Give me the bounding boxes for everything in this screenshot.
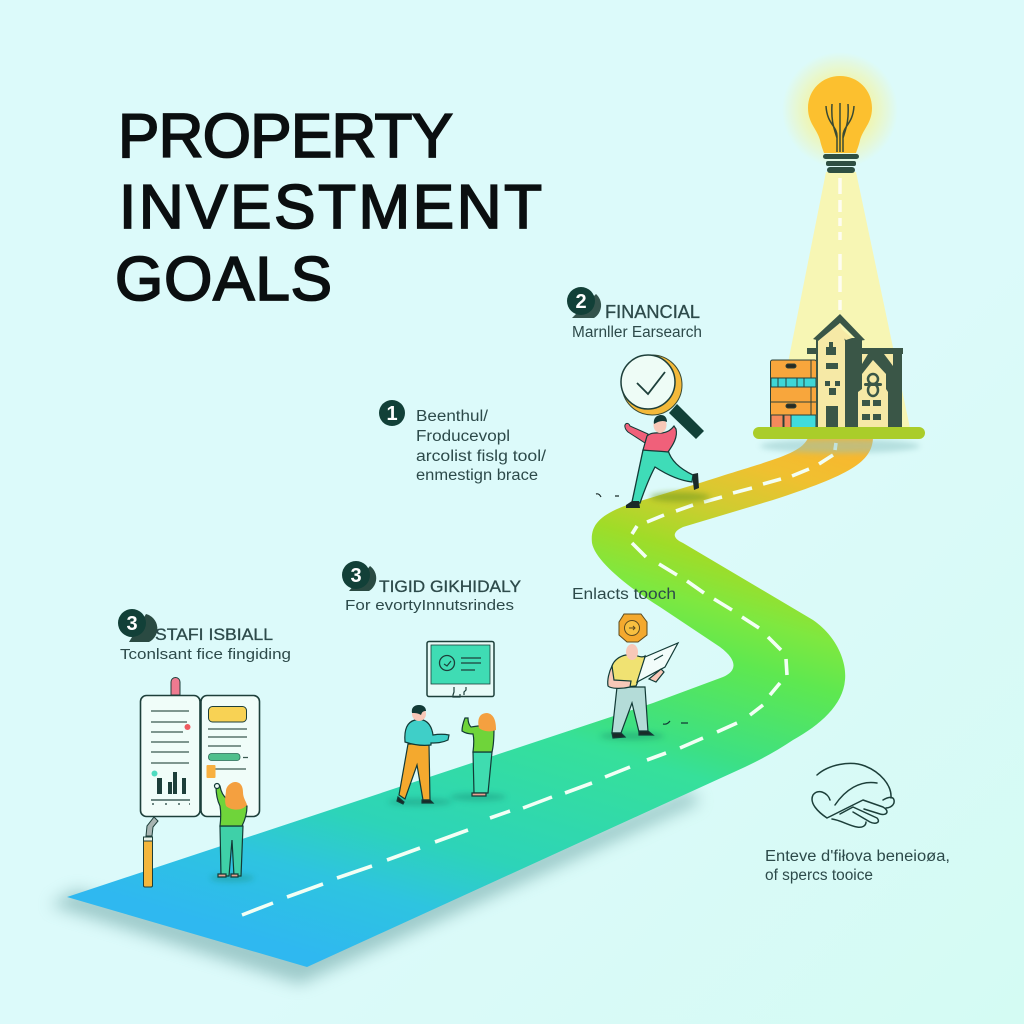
icon: handshake (812, 763, 894, 827)
person with hex sign and plan (600, 614, 688, 740)
right house (858, 348, 903, 428)
bottom right note: Enteve d'fiłova beneioøa, (765, 848, 950, 865)
man (397, 705, 449, 804)
woman (462, 713, 496, 796)
step 2 heading: FINANCIAL (605, 302, 700, 322)
badge 1: 1 (386, 403, 398, 425)
open planning board (140, 678, 260, 887)
bottom right note (765, 848, 950, 884)
light beam (775, 172, 910, 428)
title (115, 102, 542, 314)
road centre dashes (242, 443, 836, 915)
step 3 heading: left: STAFI ISBIALL (155, 626, 273, 644)
orange stacked building (770, 360, 816, 428)
tall central tower (807, 314, 865, 428)
pen stand (144, 817, 158, 887)
step 3 heading: middle (342, 561, 521, 614)
magnifying glass (621, 355, 704, 439)
left page (140, 696, 200, 816)
step 3 heading: middle: TIGID GIKHIDALY (379, 577, 521, 596)
bottom right note: of spercs tooice (765, 867, 873, 884)
badge 3 (342, 561, 376, 591)
pink pin (171, 678, 180, 695)
step 3 heading: left: Tconlsant fice fingiding (120, 646, 291, 663)
step 1 text block: Beenthul/ (416, 408, 489, 425)
two people talking (388, 705, 506, 806)
step 1 text block (379, 400, 547, 484)
title: PROPERTY (118, 102, 453, 171)
person with magnifying glass (596, 355, 710, 508)
title: GOALS (115, 245, 332, 314)
badge 2: 2 (575, 291, 587, 313)
step 2 heading (567, 287, 702, 341)
badge 3: 3 (126, 613, 138, 635)
title: INVESTMENT (119, 173, 542, 242)
right page (201, 696, 260, 816)
step 1 text block: arcolist fislg tool/ (416, 448, 547, 465)
step 3 heading: left (118, 609, 291, 663)
step 3 heading: middle: For evortyInnutsrindes (345, 597, 514, 614)
step 1 text block: enmestign brace (416, 467, 538, 484)
step 2 heading: Marnller Earsearch (572, 324, 702, 341)
hexagon badge (619, 614, 647, 642)
mini bar chart (157, 772, 186, 794)
badge 1 (379, 400, 408, 433)
badge 3 (118, 609, 157, 642)
monitor icon (427, 642, 494, 697)
light bulb (782, 52, 898, 173)
badge 3: 3 (350, 565, 362, 587)
platform and buildings (753, 314, 925, 453)
step label: Enlacts tooch: Enlacts tooch (572, 586, 676, 603)
road (50, 438, 873, 984)
step 1 text block: Froducevopl (416, 428, 510, 445)
woman at board (210, 782, 254, 882)
